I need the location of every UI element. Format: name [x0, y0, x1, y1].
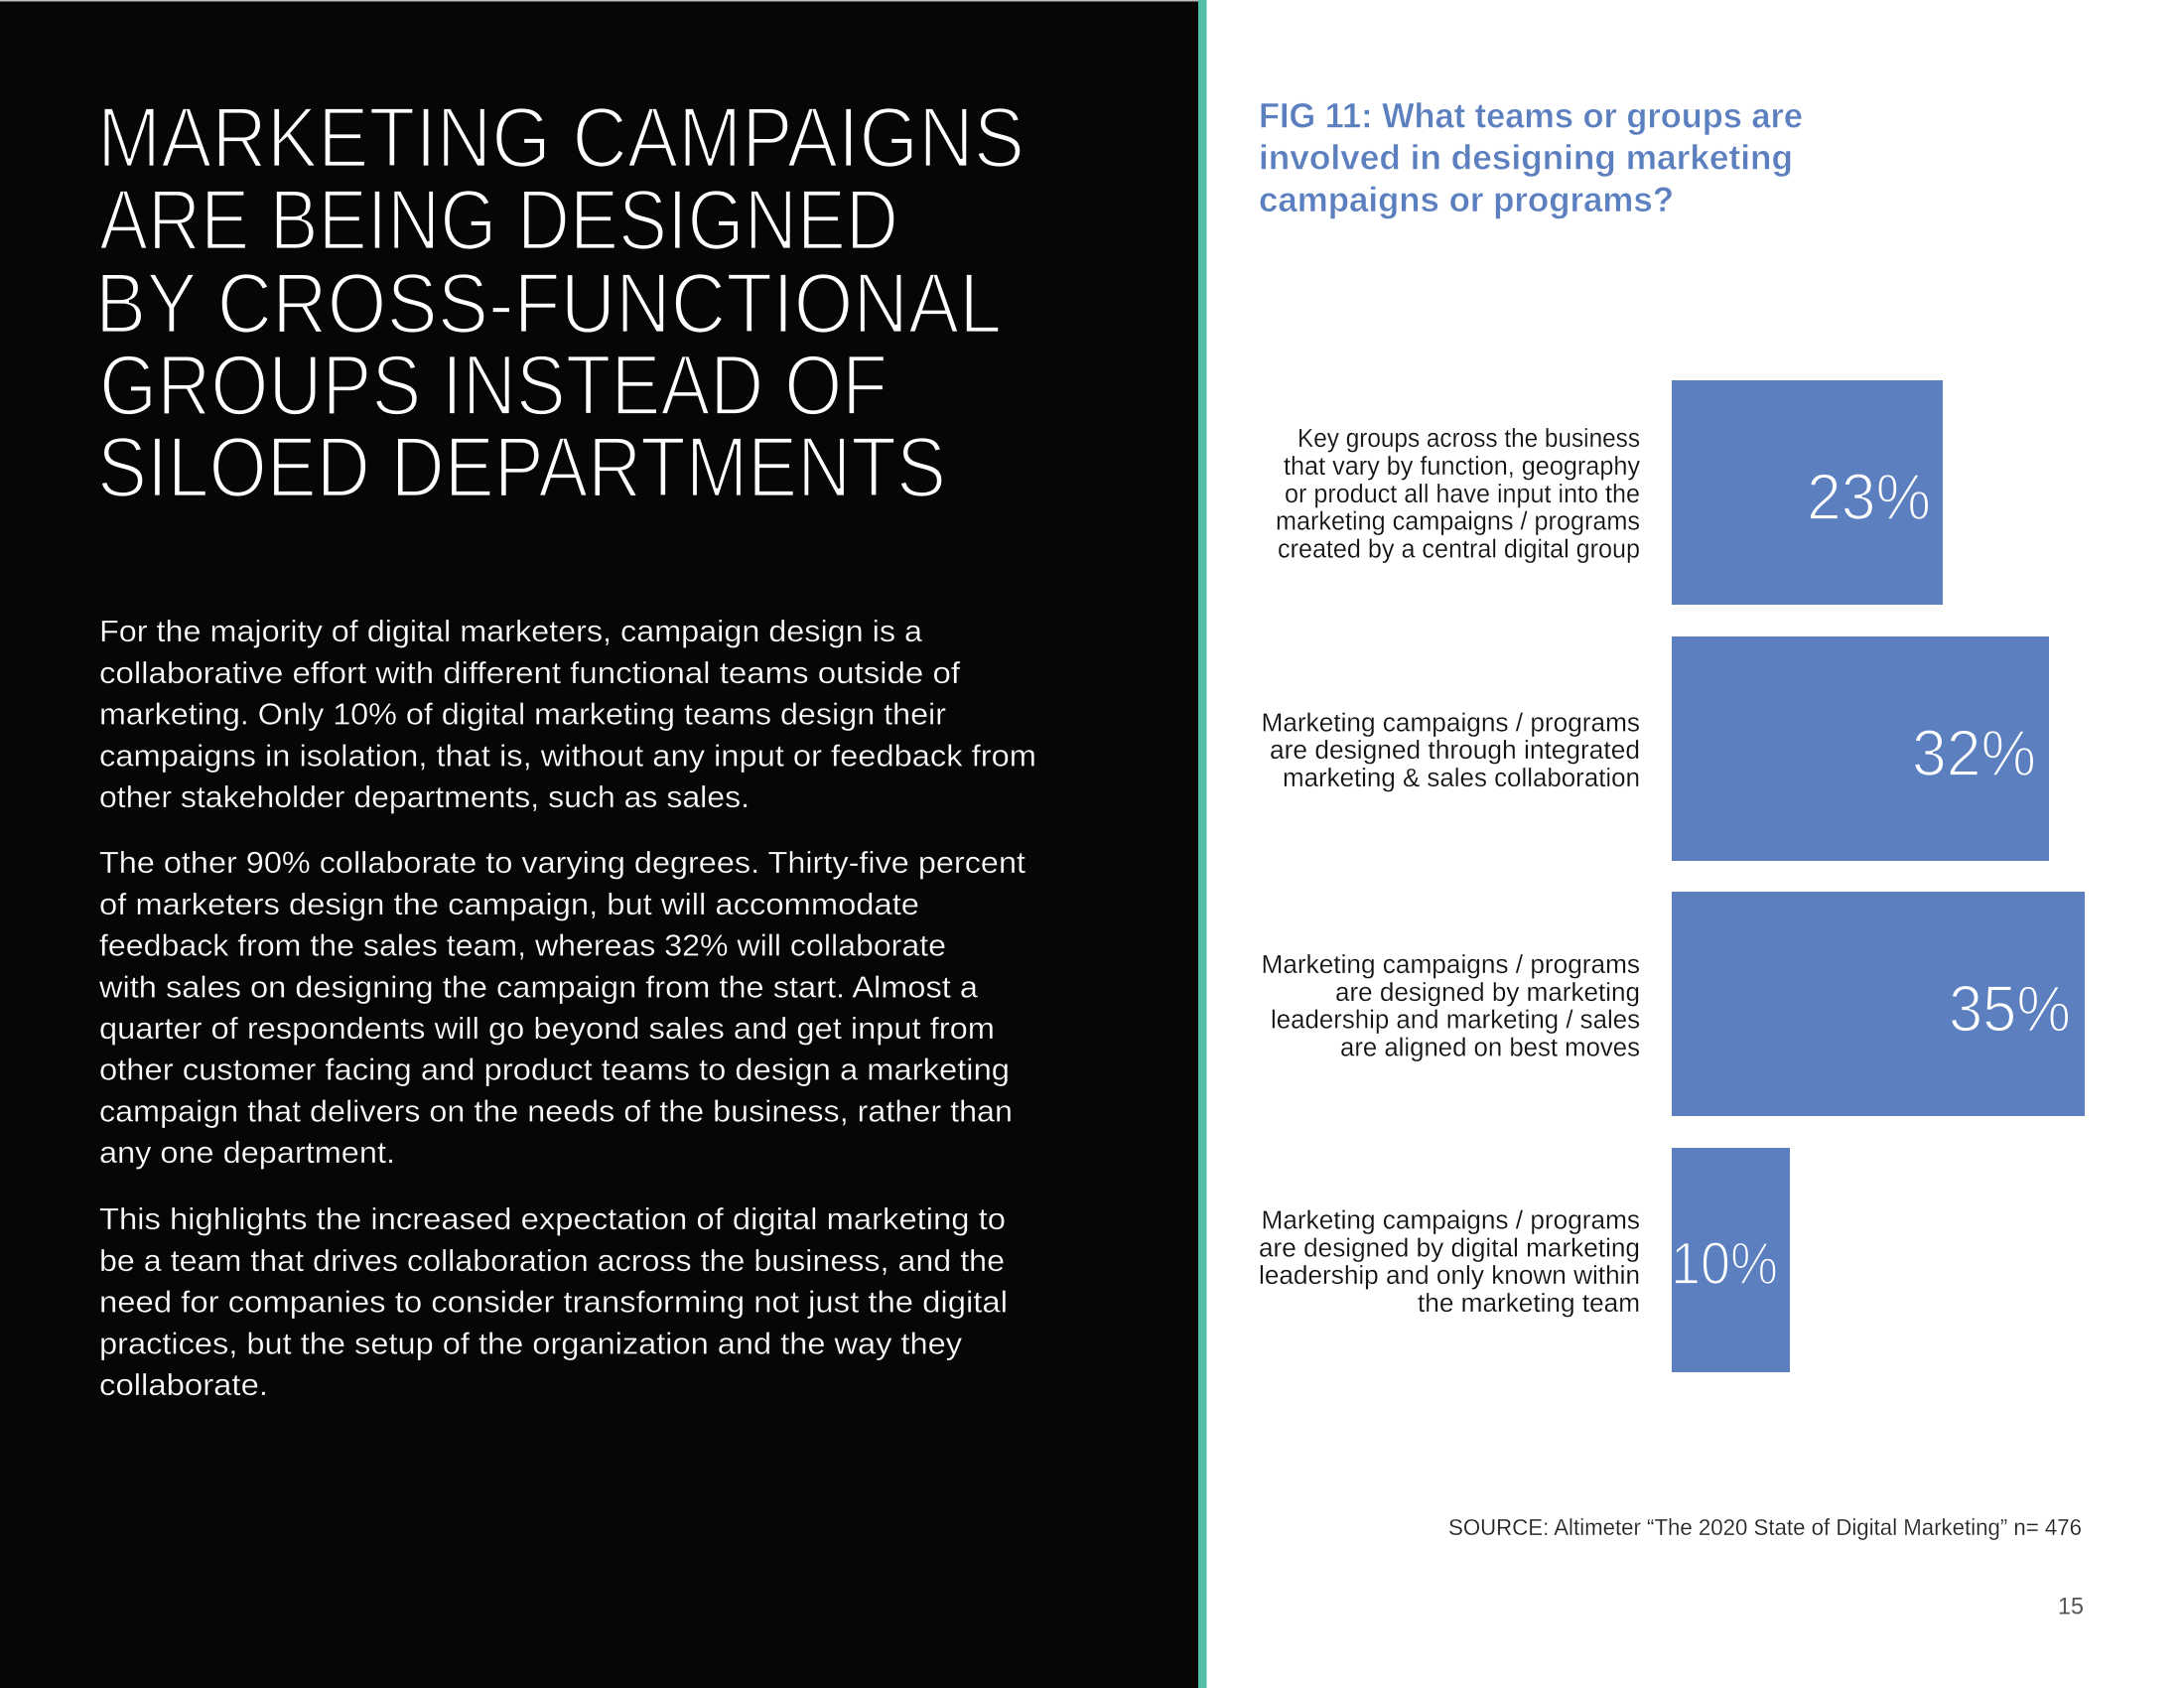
figure heading: campaigns or programs?: [1259, 181, 1674, 219]
row: 32%: [1261, 636, 2049, 861]
body text: paragraph 2: The other 90% collaborate to varying degrees. Thirty-five percent: [99, 846, 1026, 880]
body text: paragraph 3: collaborate.: [99, 1368, 268, 1402]
row: 10%: 10%: [1671, 1230, 1778, 1297]
title: ARE BEING DESIGNED: [99, 173, 898, 268]
figure heading: involved in designing marketing: [1259, 139, 1793, 178]
row: 23%: that vary by function, geography: [1284, 453, 1640, 481]
body text: paragraph 1: [99, 615, 1036, 814]
row: 35%: [1261, 892, 2085, 1116]
row: 35%: are designed by marketing: [1335, 979, 1640, 1007]
body text: paragraph 1: For the majority of digital marketers, campaign design is a: [99, 615, 922, 648]
row: 35%: are aligned on best moves: [1340, 1035, 1640, 1062]
body text: paragraph 3: need for companies to consider transforming not just the digital: [99, 1286, 1008, 1320]
row: 10%: are designed by digital marketing: [1259, 1235, 1640, 1263]
body text: paragraph 2: with sales on designing the campaign from the start. Almost a: [98, 970, 978, 1004]
row: 23%: marketing campaigns / programs: [1276, 508, 1640, 536]
row: 32%: marketing & sales collaboration: [1283, 765, 1640, 792]
row: 23%: or product all have input into the: [1285, 481, 1640, 508]
body text: paragraph 1: campaigns in isolation, that is, without any input or feedback from: [99, 739, 1036, 773]
row: 23%: created by a central digital group: [1278, 536, 1640, 564]
row: 10%: Marketing campaigns / programs: [1261, 1207, 1640, 1235]
title: SILOED DEPARTMENTS: [97, 420, 946, 515]
body text: paragraph 2: other customer facing and product teams to design a marketing: [99, 1054, 1010, 1087]
row: 10%: the marketing team: [1418, 1290, 1640, 1318]
teal vertical divider: [1198, 0, 1207, 1688]
bar chart: [1259, 380, 2085, 1372]
row: 23%: 23%: [1807, 460, 1931, 533]
row: 35%: 35%: [1949, 972, 2071, 1046]
title: BY CROSS-FUNCTIONAL: [95, 256, 1002, 352]
title: MARKETING CAMPAIGNS: [97, 90, 1024, 186]
figure heading: [1259, 97, 1803, 219]
body text: paragraph 2: quarter of respondents will go beyond sales and get input from: [99, 1012, 995, 1046]
body text: paragraph 1: other stakeholder departments, such as sales.: [99, 780, 750, 814]
body text: paragraph 2: of marketers design the campaign, but will accommodate: [99, 888, 919, 921]
body text: paragraph 2: any one department.: [99, 1136, 395, 1170]
row: 23%: Key groups across the business: [1297, 425, 1640, 453]
panel: dark left page: [0, 0, 1198, 1688]
title: [95, 90, 1024, 515]
body text: paragraph 3: This highlights the increased expectation of digital marketing to: [99, 1202, 1006, 1236]
row: 35%: Marketing campaigns / programs: [1261, 951, 1640, 979]
row: 23%: [1276, 380, 1943, 605]
body text: paragraph 2: feedback from the sales team, whereas 32% will collaborate: [99, 929, 946, 963]
body text: paragraph 1: collaborative effort with different functional teams outside of: [99, 656, 961, 690]
source note: SOURCE: Altimeter “The 2020 State of Digital Marketing” n= 476: [1448, 1514, 2082, 1540]
row: 35%: leadership and marketing / sales: [1271, 1007, 1640, 1035]
figure heading: FIG 11: What teams or groups are: [1259, 97, 1803, 136]
row: 32%: 32%: [1912, 716, 2036, 789]
row: 32%: Marketing campaigns / programs: [1261, 709, 1640, 737]
body text: paragraph 2: [98, 846, 1026, 1170]
body text: paragraph 2: campaign that delivers on the needs of the business, rather than: [99, 1094, 1013, 1128]
body text: paragraph 1: marketing. Only 10% of digital marketing teams design their: [99, 698, 946, 732]
row: 10%: [1259, 1148, 1790, 1372]
body text: paragraph 3: [99, 1202, 1008, 1402]
page number: 15: [2058, 1594, 2084, 1620]
body text: paragraph 3: practices, but the setup of the organization and the way they: [99, 1327, 963, 1360]
title: GROUPS INSTEAD OF: [99, 338, 887, 433]
body text: paragraph 3: be a team that drives collaboration across the business, and the: [99, 1244, 1005, 1278]
row: 10%: leadership and only known within: [1259, 1262, 1640, 1290]
row: 32%: are designed through integrated: [1270, 737, 1640, 765]
